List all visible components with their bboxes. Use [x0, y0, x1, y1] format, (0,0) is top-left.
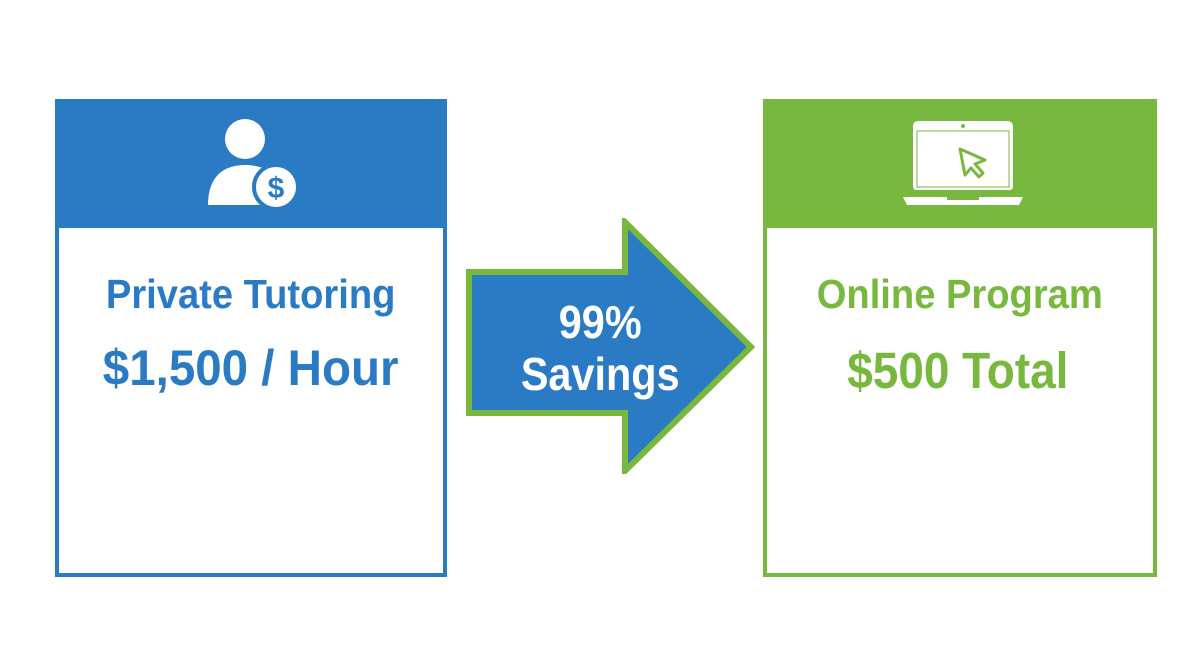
- arrow text: Savings: [521, 348, 679, 400]
- header: green band: [763, 99, 1157, 228]
- price: $1,500 / Hour: $1,500 / Hour: [103, 340, 399, 396]
- panel: private tutoring: [55, 99, 447, 577]
- panel: online program: [763, 99, 1157, 577]
- title: Online Program: Online Program: [817, 271, 1103, 317]
- arrow text: 99%: [559, 296, 641, 348]
- icon: person with dollar coin: [208, 119, 296, 207]
- icon: laptop with cursor: [903, 121, 1023, 205]
- title: Private Tutoring: Private Tutoring: [106, 271, 396, 317]
- arrow text: [521, 296, 679, 400]
- arrow: 99% savings: [466, 218, 756, 474]
- header: blue band: [55, 99, 447, 228]
- price: $500 Total: $500 Total: [847, 342, 1069, 399]
- icon: person with dollar coin: $: [268, 172, 285, 205]
